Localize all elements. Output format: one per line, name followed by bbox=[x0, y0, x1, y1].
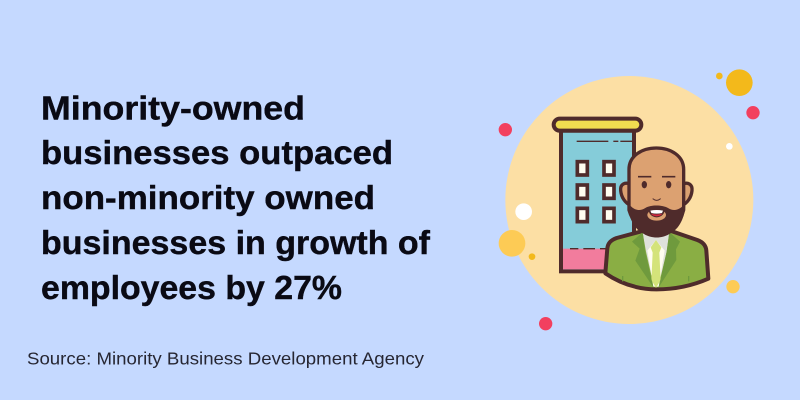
illustration: businessman and building bbox=[499, 69, 760, 330]
title: non-minority owned bbox=[41, 179, 375, 216]
ears bbox=[621, 183, 692, 205]
source text: Source: Minority Business Development Agency bbox=[27, 348, 424, 368]
head bbox=[629, 148, 684, 233]
icon: businessman bbox=[605, 148, 708, 289]
title: businesses outpaced bbox=[41, 134, 393, 171]
icon: office building bbox=[554, 119, 641, 271]
decorative dots bbox=[499, 69, 760, 330]
title: Minority-owned bbox=[41, 90, 305, 126]
background circle bbox=[505, 76, 753, 324]
title: employees by 27% bbox=[41, 269, 342, 306]
beard bbox=[628, 203, 685, 237]
shirt and tie bbox=[623, 232, 689, 288]
face details bbox=[638, 177, 675, 200]
title bbox=[41, 90, 431, 306]
title: businesses in growth of bbox=[41, 224, 431, 261]
suit bbox=[605, 231, 708, 289]
mouth bbox=[647, 209, 666, 221]
